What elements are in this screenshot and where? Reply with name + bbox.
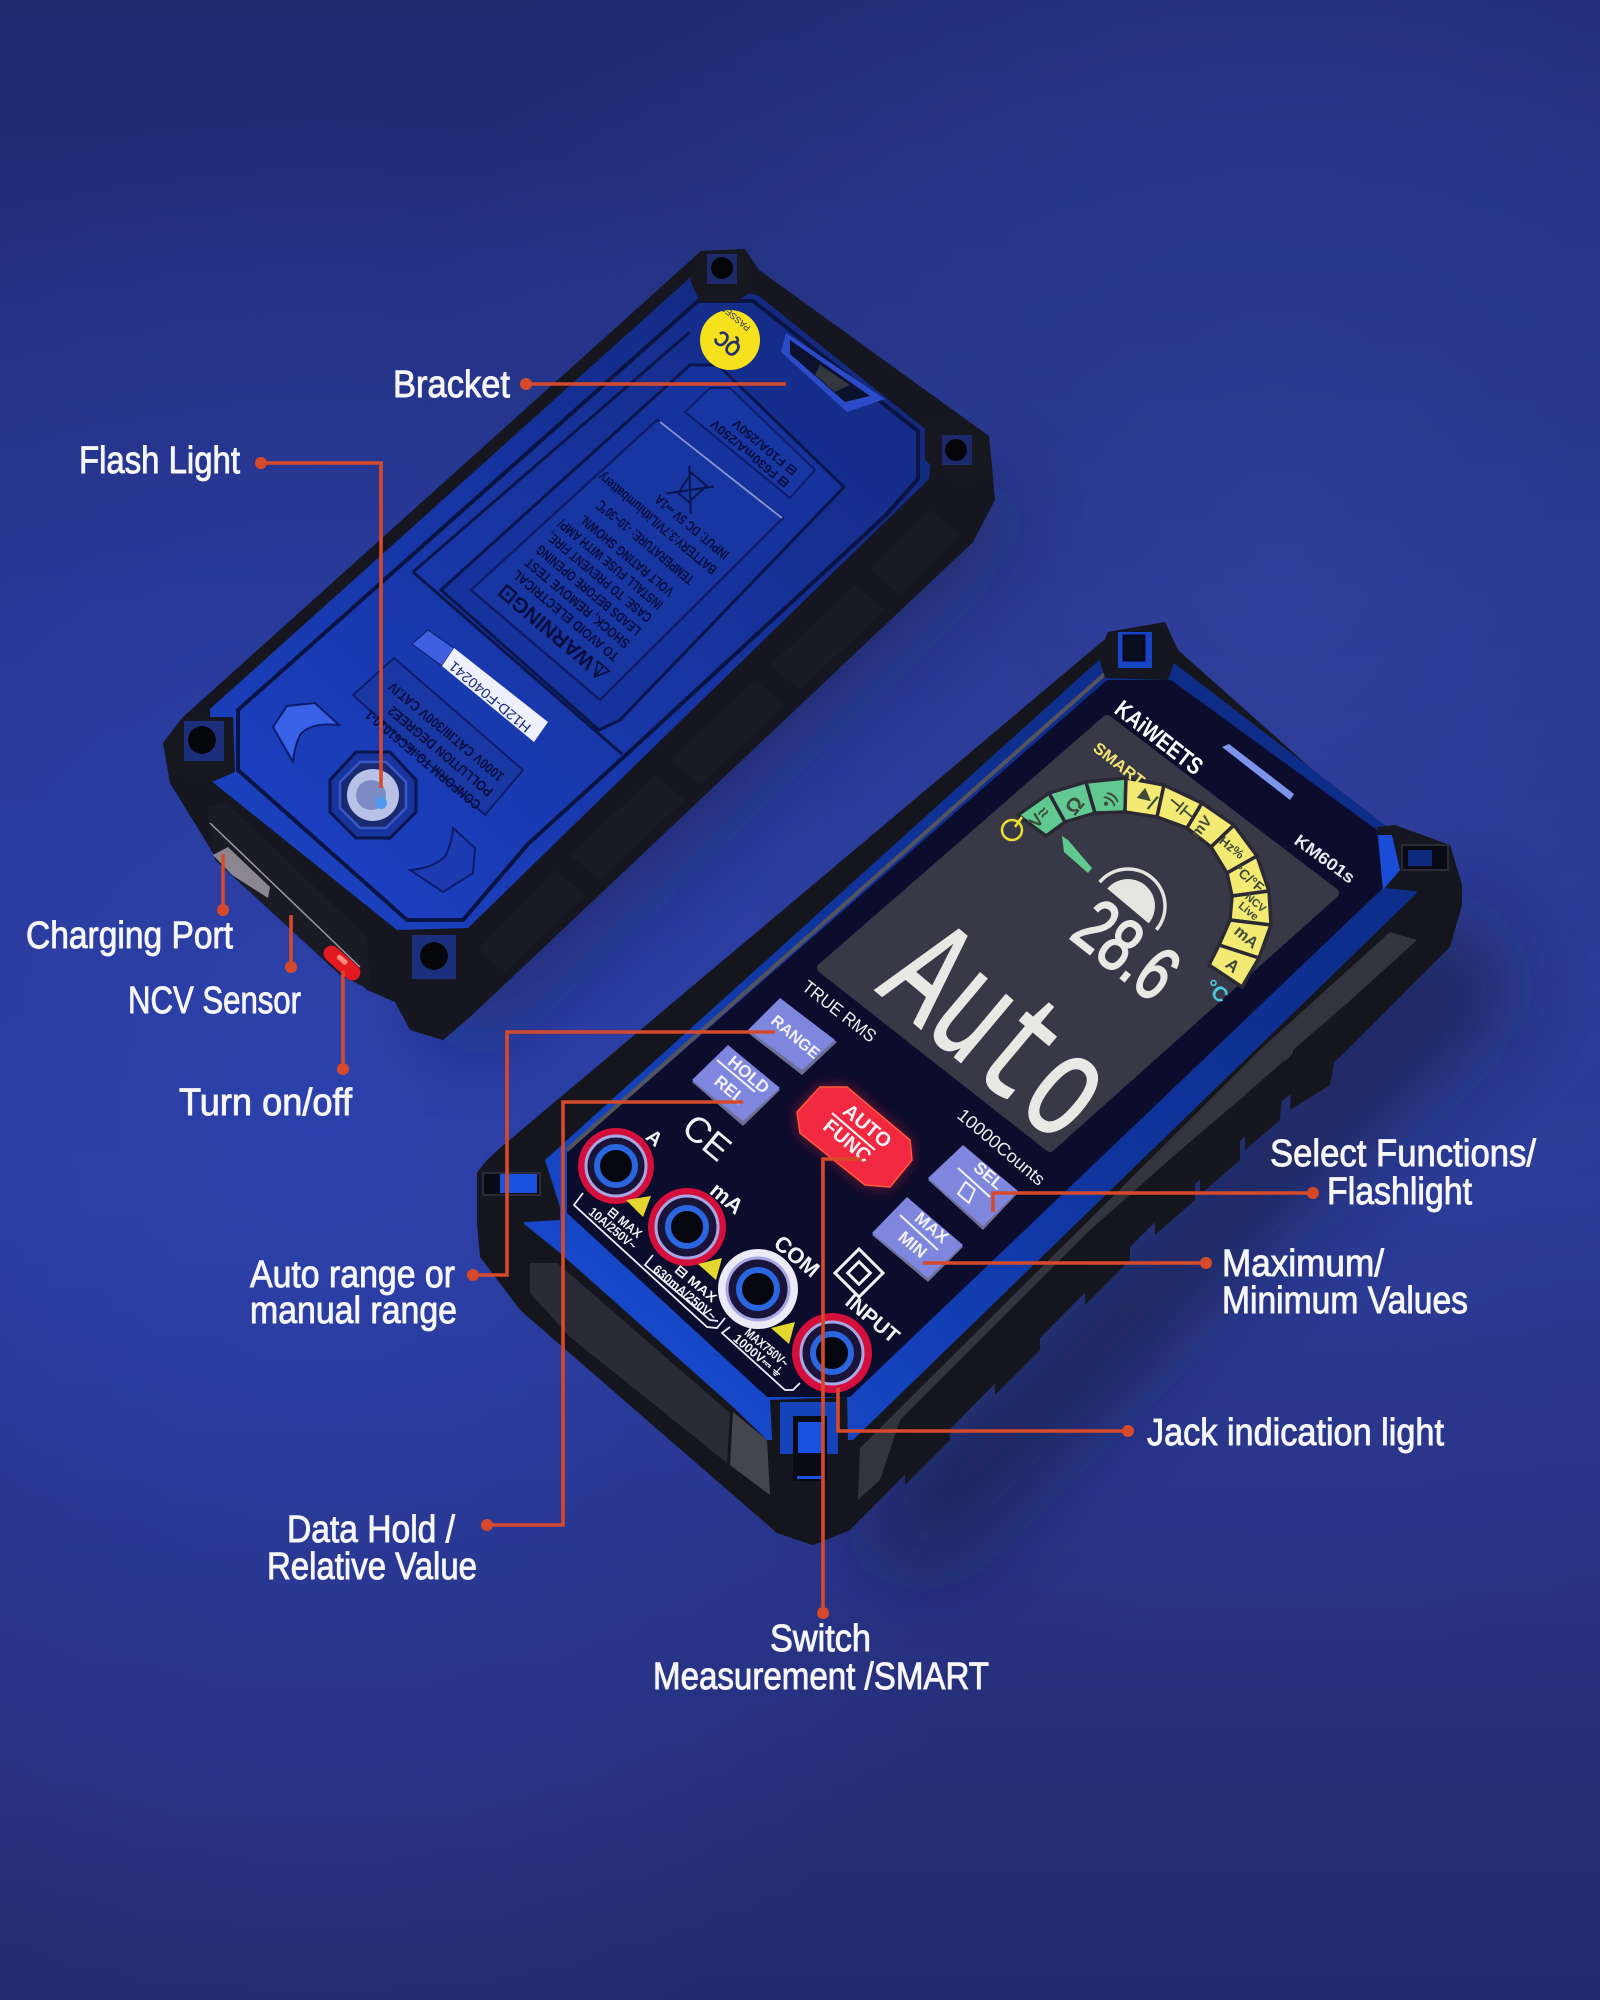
corner cap right	[1377, 825, 1462, 900]
callout: turn on/off: Turn on/off	[179, 1082, 352, 1124]
model number: KM601s	[1291, 831, 1358, 887]
device shadows	[430, 470, 1510, 1570]
callout: select functions: Select Functions/	[1270, 1133, 1536, 1175]
gauge labels	[1025, 785, 1268, 977]
button: hold rel	[692, 1045, 780, 1126]
gauge labels: ⊣⊢	[1164, 792, 1200, 826]
warning text: INPUT: DC 5V ⎓1A	[651, 492, 732, 563]
gauge labels: ▶|	[1136, 785, 1161, 811]
gauge labels: A	[1222, 955, 1243, 977]
light slot	[1222, 744, 1294, 800]
jack COM: COM	[769, 1230, 825, 1282]
serial label	[412, 630, 548, 742]
icon: power	[1002, 817, 1022, 840]
callout: auto range	[250, 1032, 775, 1332]
callout: switch measurement	[653, 1159, 989, 1698]
side grip blocks	[478, 510, 960, 972]
dome indicator	[1100, 854, 1180, 930]
lower panel seam	[413, 332, 690, 572]
callout: charging port	[26, 854, 233, 957]
jack A	[578, 1125, 666, 1204]
bracket slot	[781, 333, 885, 412]
gauge labels: V≈	[1025, 802, 1054, 832]
side rim blue	[210, 275, 934, 930]
rating text	[586, 1204, 792, 1380]
warning triangles	[626, 1196, 795, 1344]
callout: max min values: Maximum/	[1222, 1243, 1384, 1285]
callout: auto range: manual range	[250, 1290, 457, 1332]
gauge labels: NCV	[1242, 891, 1268, 916]
rating text: ⊟ MAX	[672, 1262, 720, 1306]
charging port	[213, 847, 270, 898]
button: auto func: FUNC	[819, 1115, 875, 1168]
callout: turn on/off	[179, 971, 352, 1124]
main reading: Auto	[845, 893, 1142, 1181]
flash light lens	[330, 752, 416, 838]
SMART label: SMART	[1090, 740, 1147, 790]
rating text: MAX750V~	[742, 1325, 792, 1371]
corner screw top	[690, 249, 755, 302]
conformity label: POLLUTION DEGREE2	[384, 703, 496, 800]
brand name: KAiWEETS	[1109, 695, 1208, 781]
warning text: LEADS BEFORE OPENING	[532, 542, 644, 639]
button: max min: MIN	[894, 1227, 931, 1262]
warning text: SHOCK, REMOVE TEST	[521, 555, 633, 652]
callout: data hold	[267, 1102, 743, 1588]
gauge labels: mA	[1231, 923, 1262, 953]
gauge labels: Hz%	[1216, 833, 1248, 862]
conformity label: 1000V CAT.III/300V CAT.IV	[384, 678, 507, 785]
warning text: BATTERY:3.7V/Lithiumbattery	[595, 469, 720, 578]
warning text: VOLT RATING SHOWN.	[576, 512, 677, 600]
button: sel	[928, 1145, 1018, 1230]
callout: jack indication light: Jack indication light	[1147, 1412, 1444, 1454]
corner screw bottom	[397, 930, 474, 1040]
QC sticker: QC	[709, 325, 746, 362]
callout: charging port: Charging Port	[26, 915, 233, 957]
callout: max min values	[923, 1243, 1468, 1322]
back housing	[163, 249, 995, 1040]
icon: right chevron	[410, 828, 475, 892]
rating text: 630mA/250V~	[650, 1262, 720, 1324]
jack COM	[718, 1230, 825, 1329]
fuse label	[685, 388, 815, 498]
rating brackets	[574, 1193, 800, 1390]
button: auto func	[797, 1087, 912, 1187]
callout: select functions: Flashlight	[1327, 1171, 1472, 1213]
right grip ridge	[858, 932, 1417, 1500]
left grip	[530, 1263, 770, 1495]
callout: switch measurement: Measurement /SMART	[653, 1656, 989, 1698]
pointer needle	[1062, 836, 1092, 873]
warning text: TEMPERATURE: -10~30℃	[593, 497, 697, 588]
label highlight line	[660, 422, 782, 518]
gauge labels: •))	[1098, 789, 1121, 811]
power button	[320, 942, 364, 984]
corner cap left	[477, 1160, 560, 1225]
TRUE RMS label: TRUE RMS	[799, 976, 880, 1046]
CE mark: CE	[675, 1106, 739, 1169]
callout: flash light: Flash Light	[79, 440, 240, 482]
callout: max min values: Minimum Values	[1222, 1280, 1468, 1322]
callout: select functions	[993, 1133, 1536, 1213]
callout: jack indication light	[838, 1388, 1444, 1454]
icon: crossed bin	[666, 466, 714, 514]
conformity label	[353, 658, 523, 815]
callout: data hold: Data Hold /	[287, 1509, 455, 1551]
corner screw right	[925, 415, 993, 486]
warning text: ⚠WARNING⊡	[494, 579, 614, 686]
callout: bracket: Bracket	[393, 364, 510, 406]
callout: flash light	[79, 440, 381, 788]
end cap	[207, 803, 370, 990]
button: max min: MAX	[911, 1208, 953, 1248]
panel edge	[567, 672, 1107, 1150]
rating text: ⊟ MAX	[605, 1204, 645, 1241]
warning text: TO AVOID ELECTRICAL	[509, 566, 622, 665]
corner screw left	[163, 717, 235, 785]
button: hold rel: HOLD	[724, 1052, 773, 1098]
warning text	[494, 469, 732, 686]
serial label: H12D-F040241	[445, 658, 534, 736]
jack A: A	[641, 1125, 666, 1151]
button: auto func: AUTO	[838, 1100, 895, 1153]
icon: left chevron	[273, 703, 339, 762]
button: range	[748, 998, 837, 1075]
back of multimeter	[163, 249, 995, 1040]
icon: double insulation	[835, 1249, 883, 1297]
gauge labels: Live	[1236, 900, 1260, 923]
rating text: 10A/250V~	[586, 1204, 640, 1253]
jack INPUT	[792, 1290, 904, 1393]
front of multimeter	[477, 622, 1462, 1545]
corner cap bottom	[770, 1397, 850, 1545]
callout: bracket	[393, 364, 786, 406]
back plate	[238, 301, 918, 920]
callout: auto range: Auto range or	[250, 1254, 455, 1296]
button: range: RANGE	[767, 1012, 823, 1063]
battery door	[441, 365, 844, 730]
warning text: CASE. TO PREVENT FIRE,	[544, 529, 655, 626]
secondary reading: 28.6	[1058, 883, 1195, 1017]
gauge labels: mV	[1188, 813, 1216, 842]
display panel	[567, 680, 1383, 1397]
QC sticker: PASSED	[718, 302, 752, 333]
LCD screen	[822, 720, 1334, 1147]
QC sticker	[700, 302, 760, 370]
function arc gauge	[1018, 778, 1271, 987]
callout: NCV sensor	[128, 915, 301, 1022]
callout: switch measurement: Switch	[770, 1618, 871, 1660]
right grip blocks	[905, 1005, 1345, 1485]
corner cap top	[1098, 622, 1178, 680]
jack INPUT: INPUT	[841, 1290, 904, 1348]
gauge labels: Ω	[1061, 792, 1089, 820]
icon: flashlight	[957, 1182, 978, 1203]
jack mA: mA	[705, 1177, 749, 1219]
callout: NCV sensor: NCV Sensor	[128, 980, 301, 1022]
celsius mark: °C	[1200, 975, 1233, 1008]
button: hold rel: REL	[710, 1072, 749, 1108]
conformity label: CONFORM TO:IEC61010-1	[362, 707, 484, 813]
jack mA	[648, 1177, 749, 1266]
front housing	[477, 622, 1462, 1545]
warning text: INSTALL FUSE WITH AMP/	[554, 516, 666, 613]
rating text: 1000V⎓ ⏚	[730, 1331, 785, 1380]
warning label	[471, 420, 783, 700]
counts label: 10000Counts	[953, 1105, 1049, 1189]
button: sel: SEL	[970, 1158, 1007, 1194]
fuse label: ⊟ F10A/250V	[729, 416, 800, 478]
blue rim	[523, 650, 1417, 1440]
fuse label: ⊟ F630mA/250V	[707, 416, 792, 490]
gauge labels: °C/°F	[1231, 861, 1268, 895]
callout: data hold: Relative Value	[267, 1546, 477, 1588]
button: max min	[872, 1197, 963, 1282]
